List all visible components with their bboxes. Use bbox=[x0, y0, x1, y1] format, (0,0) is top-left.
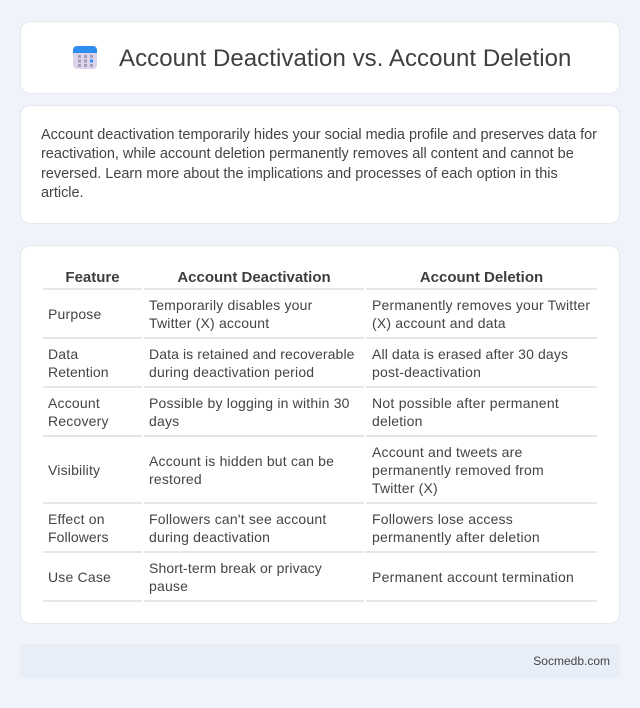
row: visibility bbox=[48, 444, 544, 496]
row: effect on followers: Followers can't see account bbox=[149, 511, 326, 527]
row: account recovery: Account bbox=[48, 395, 100, 411]
table header bbox=[65, 269, 543, 286]
panel: comparison table bbox=[20, 245, 620, 624]
row: visibility: restored bbox=[149, 471, 202, 487]
row: data retention bbox=[48, 346, 568, 380]
row: account recovery: Recovery bbox=[48, 413, 109, 429]
intro paragraph bbox=[41, 127, 597, 201]
row: visibility: Twitter (X) bbox=[372, 480, 438, 496]
row: purpose: Purpose bbox=[48, 306, 101, 322]
row: effect on followers: Effect on bbox=[48, 511, 105, 527]
row: use case: pause bbox=[149, 578, 188, 594]
row: account recovery: Not possible after permanent bbox=[372, 395, 559, 411]
row: data retention: Data bbox=[48, 346, 78, 362]
intro paragraph: article. bbox=[41, 185, 84, 201]
row: visibility: permanently removed from bbox=[372, 462, 544, 478]
row: effect on followers: Followers lose access bbox=[372, 511, 513, 527]
table header: Feature bbox=[65, 269, 120, 286]
row: data retention: post-deactivation bbox=[372, 364, 481, 380]
row: data retention: Data is retained and recoverable bbox=[149, 346, 355, 362]
row: purpose bbox=[48, 297, 590, 331]
panel: title card bbox=[20, 21, 620, 94]
row: account recovery: days bbox=[149, 413, 179, 429]
row: effect on followers bbox=[48, 511, 540, 545]
row: data retention: All data is erased after 30 days bbox=[372, 346, 568, 362]
title: Account Deactivation vs. Account Deletion bbox=[119, 45, 571, 72]
intro paragraph: reactivation, while account deletion permanently removes all content and cannot be bbox=[41, 146, 574, 162]
footer bar bbox=[20, 644, 620, 678]
row: data retention: during deactivation period bbox=[149, 364, 314, 380]
icon: calendar bbox=[73, 46, 97, 69]
row: purpose: Permanently removes your Twitter bbox=[372, 297, 590, 313]
intro paragraph: Account deactivation temporarily hides your social media profile and preserves data for bbox=[41, 127, 597, 143]
row: use case: Short-term break or privacy bbox=[149, 560, 322, 576]
row: effect on followers: permanently after deletion bbox=[372, 529, 540, 545]
row: use case: Use Case bbox=[48, 569, 111, 585]
row: account recovery: Possible by logging in within 30 bbox=[149, 395, 350, 411]
row: visibility: Account is hidden but can be bbox=[149, 453, 334, 469]
table header: Account Deletion bbox=[420, 269, 543, 286]
intro paragraph: reversed. Learn more about the implications and processes of each option in this bbox=[41, 166, 558, 182]
row: account recovery: deletion bbox=[372, 413, 423, 429]
row: purpose: (X) account and data bbox=[372, 315, 506, 331]
row: visibility: Visibility bbox=[48, 462, 100, 478]
row: purpose: Twitter (X) account bbox=[149, 315, 269, 331]
row: effect on followers: during deactivation bbox=[149, 529, 270, 545]
row: purpose: Temporarily disables your bbox=[149, 297, 312, 313]
row: account recovery bbox=[48, 395, 559, 429]
footer credit: Socmedb.com bbox=[533, 654, 610, 668]
panel: intro text bbox=[20, 105, 620, 224]
row: visibility: Account and tweets are bbox=[372, 444, 522, 460]
row: use case: Permanent account termination bbox=[372, 569, 574, 585]
table header: Account Deactivation bbox=[177, 269, 331, 286]
row: use case bbox=[48, 560, 574, 594]
row: effect on followers: Followers bbox=[48, 529, 109, 545]
row: data retention: Retention bbox=[48, 364, 109, 380]
comparison table bbox=[43, 269, 597, 602]
